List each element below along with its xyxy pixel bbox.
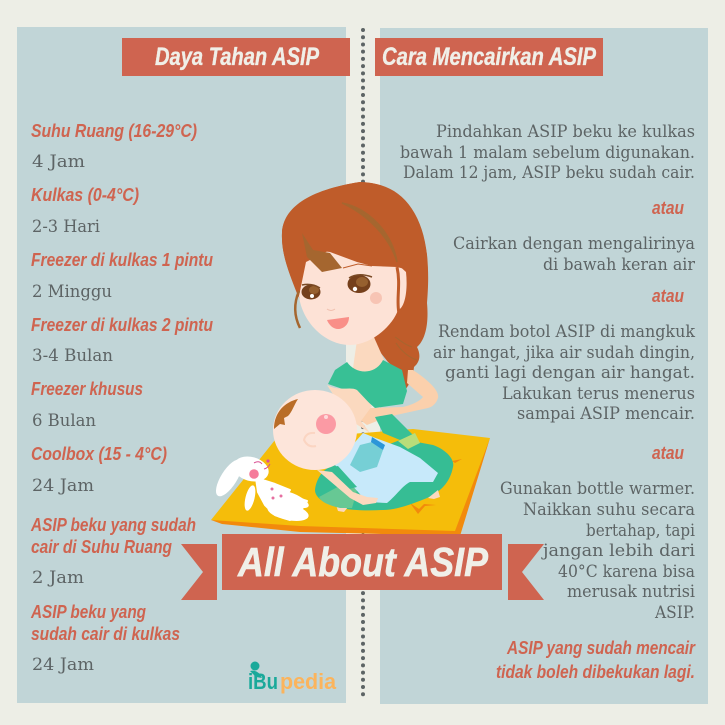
- panel: storage durations list: Freezer di kulkas 1 pintu: [31, 250, 213, 270]
- panel: thawing instructions text: air hangat, jika air sudah dingin,: [433, 343, 695, 363]
- panel: storage durations list: 24 Jam: [32, 476, 94, 496]
- ribbon body: [222, 534, 502, 590]
- panel: right background: [380, 28, 708, 704]
- baby ear: [304, 433, 316, 446]
- panel: thawing instructions text: ASIP.: [654, 603, 695, 623]
- panel: thawing instructions text: 40°C karena bisa: [558, 562, 695, 582]
- panel: storage durations list: 2 Jam: [32, 568, 84, 588]
- chest and hand: [327, 385, 372, 433]
- mat: [211, 429, 490, 536]
- panel: thawing instructions text: atau: [652, 286, 684, 306]
- panel: thawing instructions text: Lakukan terus menerus: [502, 384, 695, 404]
- panel: thawing instructions text: di bawah keran air: [543, 255, 696, 275]
- panel: thawing instructions text: bawah 1 malam sebelum digunakan.: [400, 143, 695, 163]
- title ribbon: All About ASIP: [181, 534, 544, 600]
- neck: [352, 335, 385, 378]
- panel: thawing instructions text: ganti lagi dengan air hangat.: [445, 363, 695, 383]
- heading: Cara Mencairkan ASIP: Cara Mencairkan ASIP: [382, 43, 596, 71]
- panel: storage durations list: 2-3 Hari: [32, 217, 101, 237]
- panel: storage durations list: 2 Minggu: [32, 282, 112, 302]
- ribbon tail left: [181, 544, 217, 600]
- panel: thawing instructions text: jangan lebih dari: [541, 541, 696, 561]
- baby blanket: [335, 433, 438, 503]
- rabbit toy: [211, 453, 311, 524]
- title text: All About ASIP: [237, 539, 489, 585]
- logo: iBupedia: iBu: [248, 669, 278, 694]
- panel: thawing instructions text: [400, 122, 696, 682]
- panel: storage durations list: [30, 121, 213, 675]
- fringe and hair strands: [282, 182, 428, 328]
- dotted centre divider: [361, 30, 365, 700]
- panel: thawing instructions text: Cairkan dengan mengalirinya: [453, 234, 695, 254]
- panel: storage durations list: cair di Suhu Ruang: [31, 537, 172, 557]
- panel: storage durations list: ASIP beku yang: [30, 602, 146, 622]
- panel: thawing instructions text: Naikkan suhu secara: [523, 500, 695, 520]
- waist band: [398, 433, 420, 449]
- panel: storage durations list: 24 Jam: [32, 655, 94, 675]
- panel: storage durations list: 6 Bulan: [32, 411, 96, 431]
- rabbit details: [249, 459, 282, 500]
- panel: storage durations list: Freezer khusus: [31, 379, 143, 399]
- baby mouth: [316, 414, 336, 434]
- baby hair: [274, 399, 298, 429]
- panel: storage durations list: 4 Jam: [32, 152, 85, 172]
- heading: Cara Mencairkan ASIP: [375, 38, 603, 76]
- baby arm with green sleeve: [317, 466, 378, 505]
- ribbon tail right: [508, 544, 544, 600]
- mouth: [327, 317, 349, 329]
- logo: iBupedia: [248, 662, 337, 694]
- green shirt: [328, 360, 407, 408]
- face: [299, 250, 407, 345]
- mother's right arm: [360, 370, 438, 425]
- panel: storage durations list: 3-4 Bulan: [32, 346, 113, 366]
- panel: thawing instructions text: ASIP yang sudah mencair: [506, 638, 696, 658]
- panel: thawing instructions text: merusak nutrisi: [567, 582, 696, 602]
- cheek: [370, 292, 382, 304]
- panel: storage durations list: Freezer di kulkas 2 pintu: [31, 315, 213, 335]
- heading: Daya Tahan ASIP: Daya Tahan ASIP: [155, 43, 319, 71]
- braid strands: [395, 337, 417, 360]
- panel: thawing instructions text: bertahap, tapi: [586, 521, 695, 541]
- feet: [336, 490, 440, 512]
- illustration: mother breastfeeding baby: [211, 182, 490, 536]
- panel: storage durations list: Kulkas (0-4°C): [31, 185, 139, 205]
- panel: thawing instructions text: atau: [652, 198, 684, 218]
- panel: thawing instructions text: sampai ASIP mencair.: [517, 404, 695, 424]
- baby head: [273, 390, 357, 470]
- panel: storage durations list: ASIP beku yang sudah: [30, 515, 196, 535]
- panel: thawing instructions text: Pindahkan ASIP beku ke kulkas: [436, 122, 695, 142]
- panel: thawing instructions text: tidak boleh dibekukan lagi.: [496, 662, 695, 682]
- panel: thawing instructions text: Rendam botol ASIP di mangkuk: [438, 322, 696, 342]
- panel: storage durations list: sudah cair di kulkas: [31, 624, 180, 644]
- baby bottle icon: [350, 437, 385, 472]
- logo: iBupedia: pedia: [280, 669, 337, 694]
- panel: thawing instructions text: Dalam 12 jam, ASIP beku sudah cair.: [403, 163, 695, 183]
- skirt fold: [319, 483, 358, 508]
- heading: Daya Tahan ASIP: [122, 38, 350, 76]
- eyes: [302, 275, 372, 300]
- mother's hair: [282, 182, 428, 396]
- panel: thawing instructions text: atau: [652, 443, 684, 463]
- panel: left background: [17, 27, 346, 703]
- panel: storage durations list: Suhu Ruang (16-29°C): [31, 121, 197, 141]
- panel: storage durations list: Coolbox (15 - 4°C): [31, 444, 167, 464]
- shirt lower part: [375, 414, 413, 440]
- panel: thawing instructions text: Gunakan bottle warmer.: [500, 479, 695, 499]
- skirt: [315, 440, 453, 510]
- nose: [327, 309, 335, 310]
